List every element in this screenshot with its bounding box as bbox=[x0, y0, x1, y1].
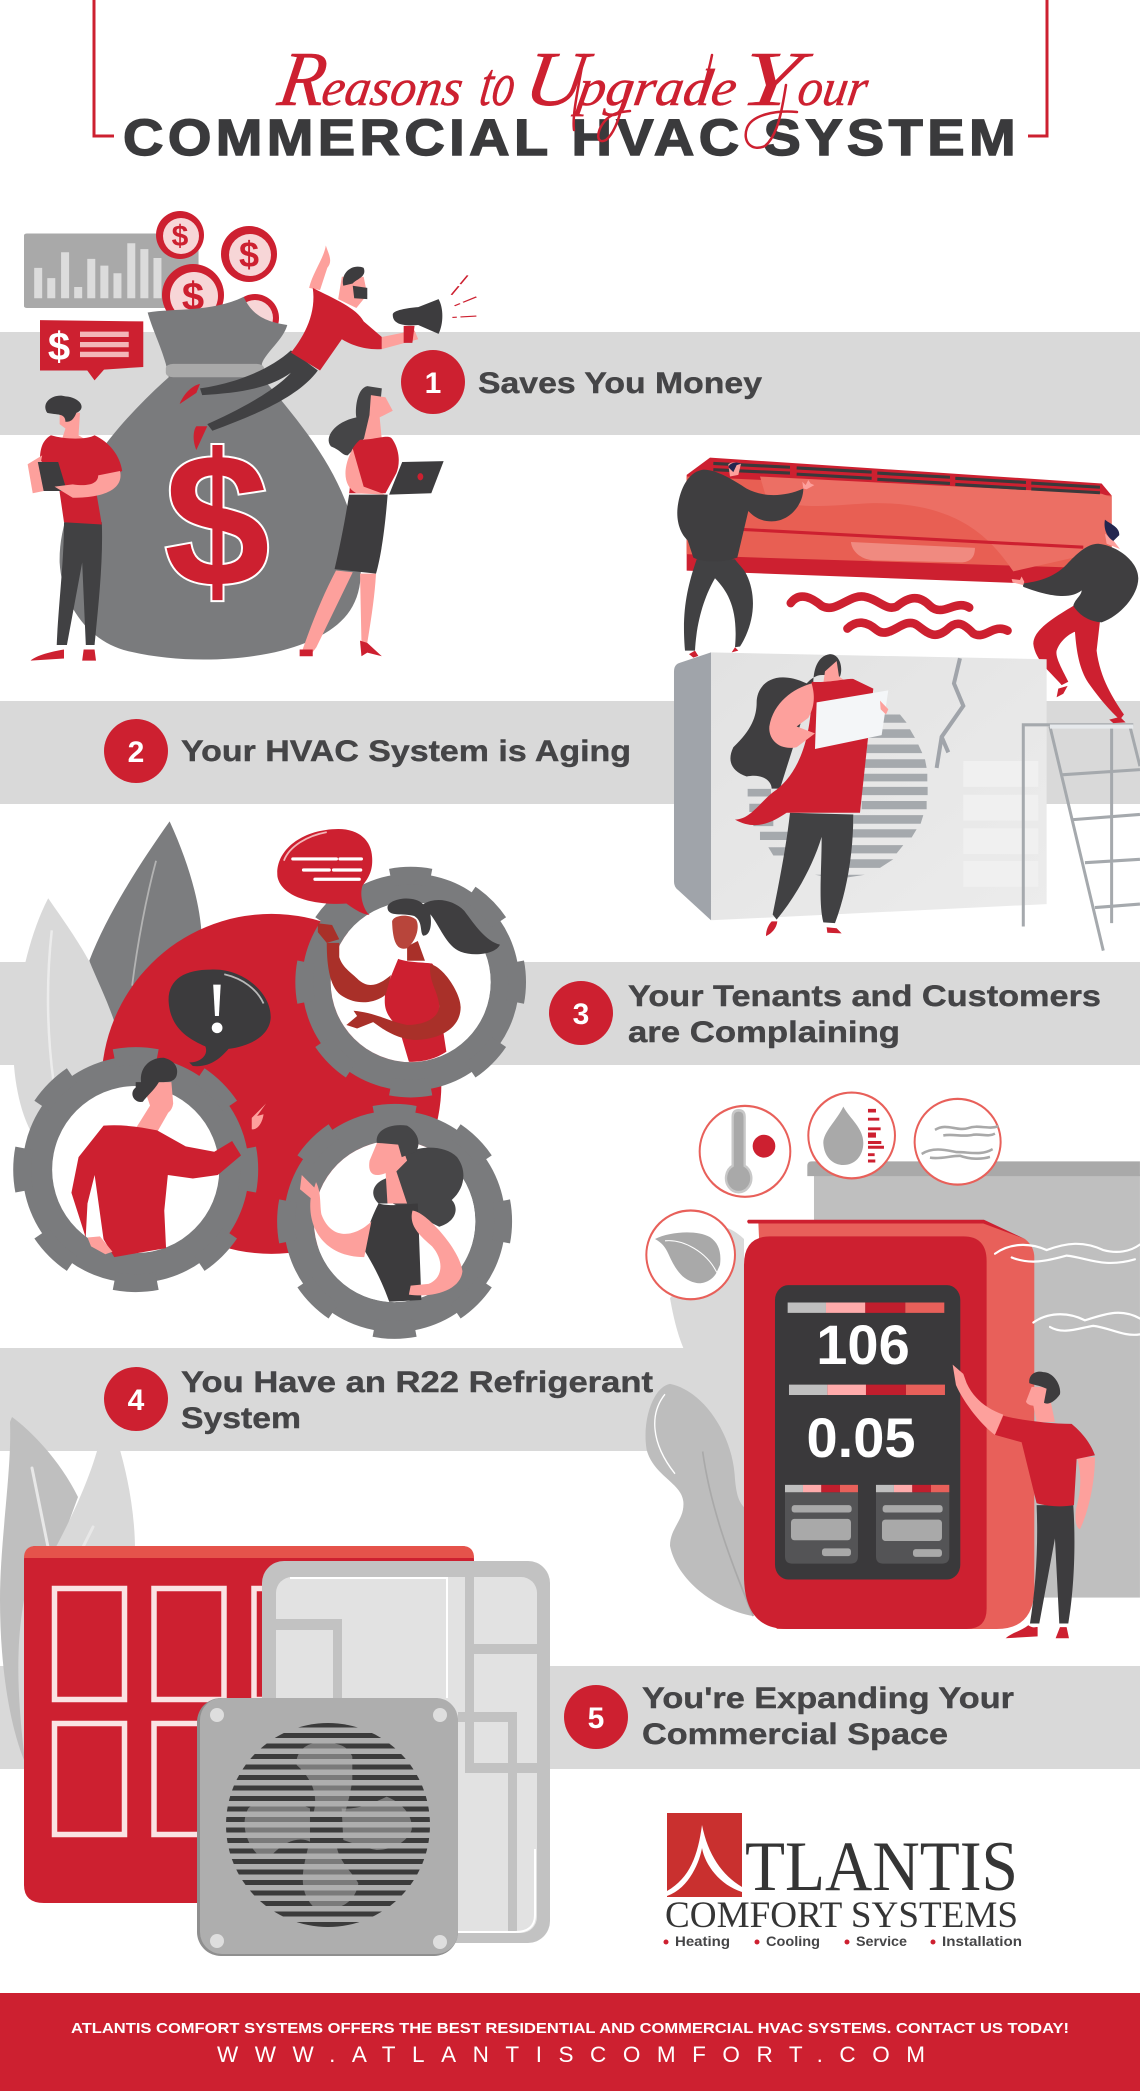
data card right bbox=[876, 1485, 949, 1564]
script heading: reasons to upgrade your: easons bbox=[318, 59, 467, 117]
script heading: reasons to upgrade your: Y bbox=[735, 35, 817, 122]
number badge 2 bbox=[104, 719, 168, 783]
fan grille slats bbox=[220, 1722, 440, 1927]
white air waves bbox=[995, 1244, 1140, 1335]
logo mark bbox=[667, 1813, 742, 1897]
number badge 4: 4 bbox=[128, 1384, 145, 1417]
vent panels bbox=[963, 761, 1038, 887]
number badge 3 bbox=[549, 981, 613, 1045]
number badge 1 bbox=[401, 350, 465, 414]
gray leaf bbox=[645, 1384, 753, 1616]
number badge 5: 5 bbox=[588, 1702, 604, 1735]
script heading: reasons to upgrade your: our bbox=[794, 59, 873, 117]
band 2 bbox=[0, 701, 1140, 804]
money bag bbox=[60, 297, 361, 660]
script heading: reasons to upgrade your: R bbox=[272, 35, 333, 122]
woman with paper bbox=[730, 654, 888, 936]
logo services: Installation bbox=[942, 1934, 1022, 1949]
person lifting left bbox=[677, 462, 814, 658]
label: r22 refrigerant system: You Have an R22 Refrigerant bbox=[181, 1366, 653, 1399]
logo subtitle: COMFORT SYSTEMS bbox=[665, 1895, 1018, 1936]
script heading: reasons to upgrade your: U bbox=[519, 35, 598, 122]
person lifting right bbox=[1012, 520, 1138, 723]
windows bbox=[54, 1588, 320, 1834]
bag tie bbox=[166, 364, 264, 377]
coins bbox=[156, 211, 279, 342]
light backdrop shape bbox=[670, 1228, 744, 1524]
glass unit bbox=[262, 1561, 550, 1943]
red circle bbox=[101, 914, 441, 1254]
gear: woman with bun bbox=[286, 1113, 503, 1330]
dollar in bubble: $ bbox=[48, 325, 70, 369]
illustration: smart thermostat bbox=[645, 1093, 1140, 1638]
band 3 bbox=[0, 962, 1140, 1065]
logo services: Heating bbox=[675, 1934, 730, 1949]
fan blades bbox=[245, 1743, 412, 1908]
script heading: reasons to upgrade your: to bbox=[476, 50, 521, 119]
logo services: Service bbox=[856, 1934, 908, 1949]
label: tenants complaining: are Complaining bbox=[628, 1016, 900, 1049]
reading 106: 106 bbox=[816, 1313, 910, 1376]
number badge 2: 2 bbox=[128, 736, 144, 769]
outdoor unit bbox=[674, 652, 1047, 920]
label: expanding commercial space: Commercial Space bbox=[642, 1718, 948, 1751]
person with ponytail bbox=[318, 899, 500, 1062]
number badge 4 bbox=[104, 1367, 168, 1431]
man pointing bbox=[71, 1058, 266, 1257]
label: hvac system aging: Your HVAC System is Aging bbox=[181, 735, 631, 768]
label: saves you money: Saves You Money bbox=[478, 367, 762, 400]
icon: humidity drop bbox=[808, 1093, 895, 1178]
gear: man bbox=[22, 1056, 249, 1283]
script heading: reasons to upgrade your bbox=[272, 35, 877, 148]
red building bbox=[24, 1546, 474, 1903]
large dollar sign on bag: $ bbox=[164, 415, 270, 627]
flying man bbox=[180, 246, 476, 450]
red speech bubble bbox=[277, 829, 372, 915]
label: expanding commercial space: You're Expanding Your bbox=[642, 1682, 1014, 1715]
cracked wall bbox=[937, 658, 963, 768]
illustration: money bag team bbox=[24, 211, 476, 661]
footer website: WWW.ATLANTISCOMFORT.COM bbox=[217, 2042, 925, 2067]
red air waves bbox=[791, 596, 1008, 635]
number badge 5 bbox=[564, 1685, 628, 1749]
man pointing at screen bbox=[953, 1365, 1095, 1638]
illustration: aging hvac units bbox=[674, 458, 1140, 951]
coins: $ bbox=[172, 220, 189, 253]
logo services bbox=[664, 1934, 1022, 1949]
device screen bbox=[775, 1285, 960, 1579]
icon: air flow bbox=[915, 1099, 1001, 1185]
coins: $ bbox=[182, 275, 204, 319]
data card left bbox=[785, 1485, 858, 1564]
number badge 3: 3 bbox=[573, 998, 589, 1031]
number badge 1: 1 bbox=[425, 367, 441, 400]
illustration: complaining people in gears bbox=[13, 821, 517, 1330]
woman with bun bbox=[300, 1125, 463, 1302]
label: tenants complaining: Your Tenants and Customers bbox=[628, 980, 1101, 1013]
ladder bbox=[1023, 725, 1140, 951]
light leaf bbox=[13, 898, 112, 1139]
icon: thermometer bbox=[700, 1106, 790, 1197]
background leaves bbox=[0, 1417, 135, 1760]
indoor ac unit bbox=[687, 458, 1112, 585]
gear: woman with ponytail bbox=[304, 876, 517, 1089]
bubble lines bbox=[80, 332, 129, 357]
title bracket bbox=[94, 0, 1047, 136]
illustration: commercial building and fan unit bbox=[24, 1546, 550, 1956]
script heading: reasons to upgrade your: pgrade bbox=[570, 59, 741, 117]
reading 0.05: 0.05 bbox=[806, 1406, 916, 1469]
footer bbox=[0, 1993, 1140, 2091]
band 5 bbox=[0, 1666, 1140, 1769]
footer message: ATLANTIS COMFORT SYSTEMS OFFERS THE BEST RESIDENTIAL AND COMMERCIAL HVAC SYSTEMS. CONTACT US TODAY! bbox=[71, 2021, 1069, 2037]
icon: leaf bbox=[646, 1211, 735, 1299]
logo wordmark: TLANTIS bbox=[745, 1828, 1018, 1906]
fan unit bbox=[197, 1698, 458, 1956]
coins: $ bbox=[239, 234, 259, 275]
label: r22 refrigerant system: System bbox=[181, 1402, 301, 1435]
megaphone bbox=[393, 275, 476, 343]
band 4 bbox=[0, 1348, 690, 1451]
fan grille bbox=[748, 714, 928, 879]
woman with laptop bbox=[300, 386, 444, 656]
dark exclamation bubble bbox=[169, 970, 271, 1066]
logo services: Cooling bbox=[766, 1934, 820, 1949]
heading: commercial hvac system: COMMERCIAL HVAC SYSTEM bbox=[123, 109, 1020, 166]
dark leaf bbox=[89, 821, 202, 1021]
bar chart panel bbox=[24, 233, 199, 308]
logo: atlantis comfort systems bbox=[664, 1813, 1022, 1949]
man with tablet bbox=[28, 396, 122, 661]
band 1 bbox=[0, 332, 1140, 435]
building bbox=[807, 1161, 1140, 1598]
speech bubble with dollar bbox=[40, 320, 143, 380]
device casing bbox=[744, 1220, 1034, 1629]
